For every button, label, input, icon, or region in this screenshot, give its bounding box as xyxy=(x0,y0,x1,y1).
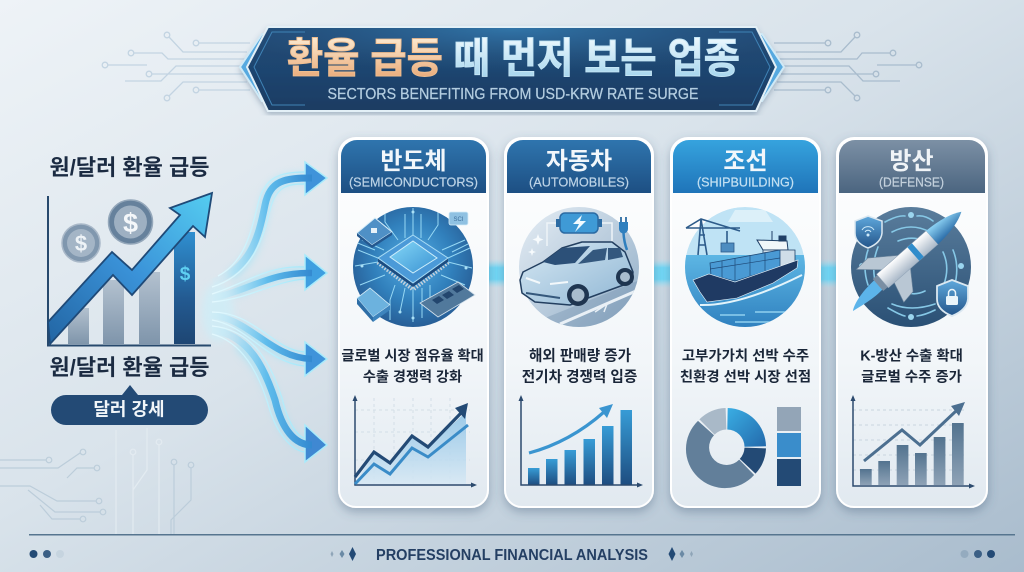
title text: 환율 급등 때 먼저 보는 업종 xyxy=(287,34,740,82)
card header xyxy=(341,140,486,193)
chart: bars with trend xyxy=(850,395,975,488)
crane load xyxy=(721,243,734,252)
caption: exchange rate surge: 원/달러 환율 급등 xyxy=(49,355,210,380)
small chip xyxy=(357,218,392,245)
body text: 해외 판매량 증가 xyxy=(529,348,632,364)
flow arrows xyxy=(202,162,327,462)
battery xyxy=(556,213,602,233)
card body xyxy=(505,138,653,507)
heading: 조선 xyxy=(723,148,768,175)
panel: defense xyxy=(833,138,987,507)
headlights xyxy=(526,278,568,284)
connector bands between cards xyxy=(486,259,839,288)
footer diamonds right xyxy=(668,547,693,561)
chart: rising bars xyxy=(518,395,643,488)
footer rule xyxy=(29,534,1015,536)
heading: 방산 xyxy=(889,148,934,175)
hull xyxy=(693,260,798,302)
banner glow xyxy=(248,28,776,110)
footer dots left xyxy=(30,550,64,558)
heat sink xyxy=(357,288,390,317)
panel: shipbuilding xyxy=(671,138,820,507)
bar: highlighted dollar xyxy=(174,232,195,344)
panel: automobiles: 전기차 경쟁력 입증 xyxy=(522,368,637,386)
panel: defense: 글로벌 수주 증가 xyxy=(861,368,962,386)
heading: 반도체 xyxy=(380,148,447,175)
chart: donut xyxy=(686,408,766,488)
footer diamonds left xyxy=(330,547,356,561)
car body xyxy=(520,242,633,305)
card body xyxy=(339,138,488,507)
heading: exchange rate surge: 원/달러 환율 급등 xyxy=(49,155,210,180)
sparkles xyxy=(528,234,544,256)
arrow: surge xyxy=(48,193,212,344)
main chip xyxy=(378,258,448,287)
charging wire xyxy=(547,223,612,246)
arrow: to defense xyxy=(212,326,327,462)
arrow: to semiconductors xyxy=(212,162,327,287)
left panel: exchange rate surge xyxy=(48,155,212,425)
bar: highlighted dollar: $ xyxy=(180,264,191,285)
subheading: (SEMICONDUCTORS) xyxy=(349,176,478,190)
plug xyxy=(619,217,628,250)
body text: 글로벌 시장 점유율 확대 xyxy=(341,348,484,364)
shield: lock xyxy=(937,280,968,316)
callout: strong dollar xyxy=(51,385,208,425)
bridge xyxy=(757,231,795,268)
icon: chip xyxy=(350,207,476,327)
card header xyxy=(673,140,818,193)
containers xyxy=(710,250,780,281)
shield: signal xyxy=(855,216,882,248)
source glow xyxy=(202,282,234,342)
chart: line growth xyxy=(352,395,477,488)
card header xyxy=(839,140,985,193)
arrow glow xyxy=(230,178,310,445)
chart: rising bars and arrow xyxy=(48,193,212,346)
footer text: PROFESSIONAL FINANCIAL ANALYSIS xyxy=(376,547,648,564)
card header xyxy=(507,140,651,193)
icon: container ship xyxy=(680,207,810,330)
card body xyxy=(837,138,987,507)
subheading: (AUTOMOBILES) xyxy=(529,176,629,190)
icon: missile xyxy=(833,191,981,331)
crane xyxy=(686,219,740,255)
panel: semiconductors: 수출 경쟁력 강화 xyxy=(363,370,462,386)
axes xyxy=(48,196,211,346)
subheading: (SHIPBUILDING) xyxy=(697,176,794,190)
radar arcs xyxy=(865,216,957,316)
body text: K-방산 수출 확대 xyxy=(860,348,963,364)
icon: coin small xyxy=(62,224,100,262)
label chip: SCI xyxy=(453,217,464,223)
circuit traces: top right xyxy=(774,32,922,101)
banner frame xyxy=(240,27,784,111)
wheels xyxy=(567,268,634,306)
arrow: to automobiles xyxy=(212,255,327,302)
windows xyxy=(543,246,590,265)
rocket xyxy=(833,191,981,331)
icon: coin large xyxy=(108,200,152,244)
circuit traces: bottom left xyxy=(0,428,194,534)
banner inner line xyxy=(254,32,770,105)
memory module xyxy=(420,282,475,317)
panel: semiconductors xyxy=(339,138,488,507)
footer dots right xyxy=(960,550,995,558)
heading: 자동차 xyxy=(546,148,612,175)
icon: coin small: $ xyxy=(75,231,87,256)
arrow: to shipbuilding xyxy=(210,312,327,376)
subheading: (DEFENSE) xyxy=(879,176,944,190)
body text: 고부가가치 선박 수주 xyxy=(682,348,809,364)
bars xyxy=(68,272,160,344)
circuit traces: top left xyxy=(102,32,250,101)
main chip pins xyxy=(378,262,448,289)
icon: electric car xyxy=(519,207,639,327)
subtitle: SECTORS BENEFITING FROM USD-KRW RATE SURGE xyxy=(328,86,698,103)
panel: shipbuilding: 친환경 선박 시장 선점 xyxy=(680,368,811,386)
legend swatches xyxy=(777,407,801,486)
panel: automobiles xyxy=(505,138,653,507)
callout: strong dollar: 달러 강세 xyxy=(93,400,165,420)
icon: coin large: $ xyxy=(123,208,138,238)
card body xyxy=(671,138,820,507)
title banner xyxy=(240,27,784,111)
